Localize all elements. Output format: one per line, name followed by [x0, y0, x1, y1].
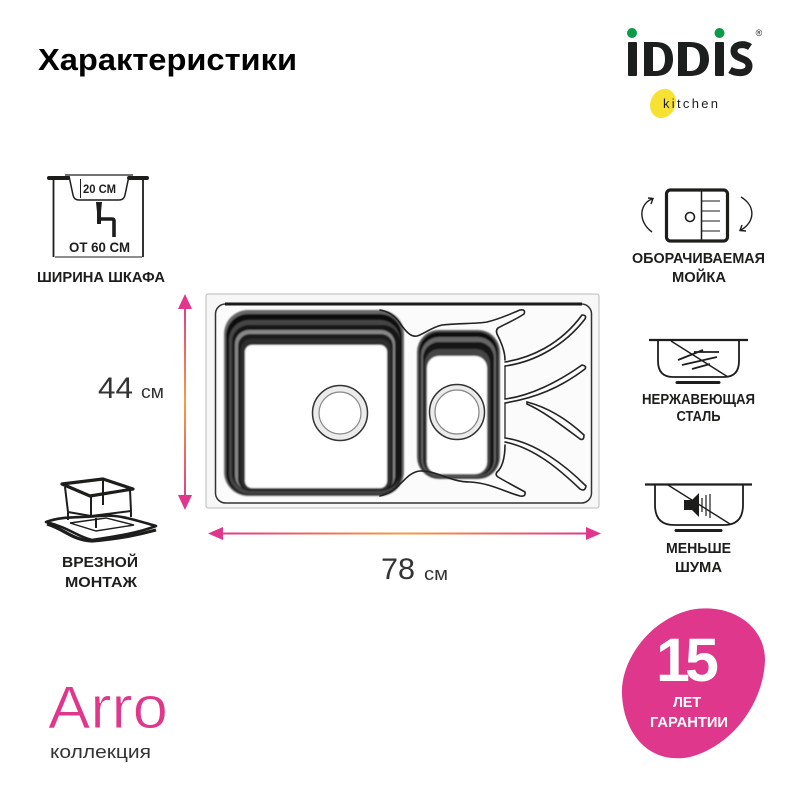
icon: cabinet width — [49, 175, 147, 257]
icon: reversible sink — [642, 190, 752, 241]
small drain — [430, 384, 484, 440]
collection name: Arro — [48, 674, 168, 741]
collection label: коллекция — [50, 741, 151, 762]
caption: stainless steel — [642, 392, 755, 425]
caption: stainless steel: СТАЛЬ — [676, 409, 720, 425]
large bowl — [224, 310, 404, 496]
caption: reversible sink: МОЙКА — [672, 268, 727, 286]
dimension: height: см — [141, 382, 164, 402]
sink inner rim — [216, 304, 592, 503]
caption: reversible sink — [632, 251, 765, 286]
warranty badge — [622, 608, 765, 758]
icon: less noise — [645, 484, 752, 530]
sink — [206, 294, 599, 508]
caption: less noise: ШУМА — [675, 560, 723, 576]
caption: flush mount — [62, 553, 138, 591]
caption: less noise: МЕНЬШЕ — [666, 541, 731, 557]
icon: stainless steel — [649, 340, 748, 382]
arrow: height — [178, 294, 192, 510]
caption: flush mount: ВРЕЗНОЙ — [62, 553, 138, 571]
caption: cabinet width: ШИРИНА ШКАФА — [37, 270, 166, 286]
title: Характеристики — [38, 42, 297, 77]
dimension: width: см — [424, 564, 448, 584]
dimension: height: 44 — [98, 372, 133, 405]
dimension: width: 78 — [381, 553, 415, 586]
icon: cabinet width: ОТ 60 СМ — [69, 240, 130, 255]
warranty badge: ГАРАНТИИ — [650, 715, 728, 731]
sink plate — [206, 294, 599, 508]
logo: iddis kitchen: kitchen — [663, 96, 720, 111]
warranty badge: 15 — [656, 626, 719, 694]
logo: iddis kitchen: ® — [756, 28, 763, 38]
large drain — [312, 386, 368, 440]
dimension: height — [98, 372, 164, 405]
caption: less noise — [666, 541, 731, 576]
dimension: width — [381, 553, 448, 586]
icon: flush mount — [46, 479, 156, 541]
caption: reversible sink: ОБОРАЧИВАЕМАЯ — [632, 251, 765, 267]
icon: cabinet width: 20 СМ — [83, 182, 116, 196]
logo: iddis kitchen — [627, 28, 763, 122]
small bowl — [417, 330, 500, 479]
warranty badge: ЛЕТ — [673, 695, 701, 711]
caption: stainless steel: НЕРЖАВЕЮЩАЯ — [642, 392, 755, 408]
caption: flush mount: МОНТАЖ — [65, 575, 138, 591]
drainboard grooves — [380, 310, 586, 496]
arrow: width — [208, 527, 601, 540]
